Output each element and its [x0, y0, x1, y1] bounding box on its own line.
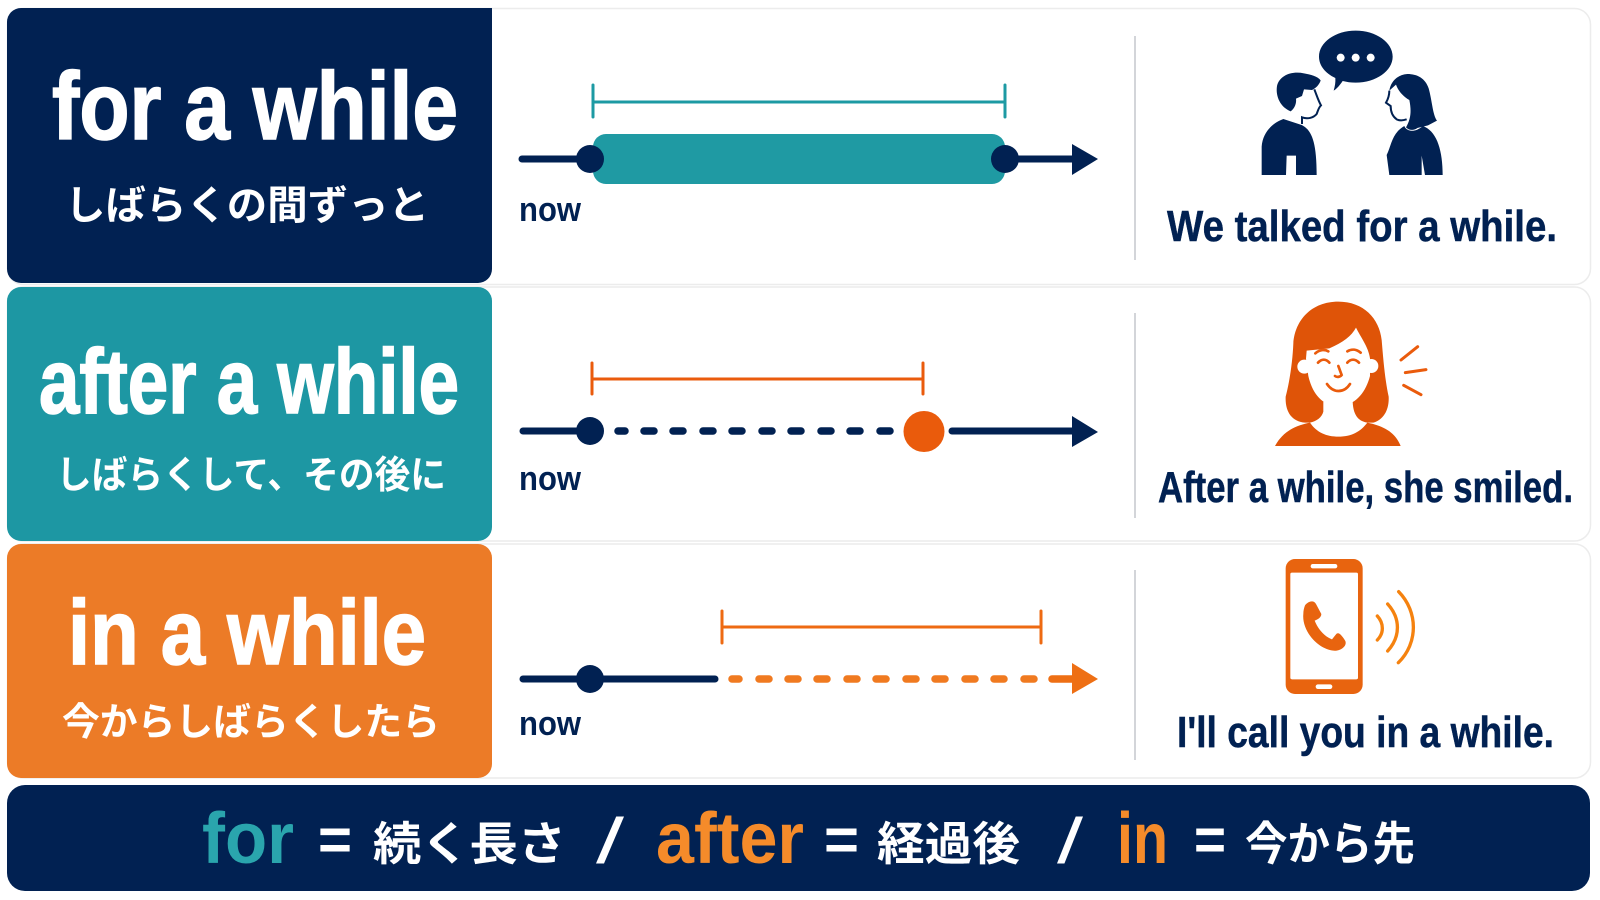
hair	[1286, 302, 1389, 423]
label block	[7, 8, 492, 283]
in meaning: 今から先	[1245, 818, 1415, 870]
separator: /	[1057, 805, 1083, 877]
handset	[1303, 601, 1346, 651]
equals: =	[824, 806, 859, 873]
panel: after a while	[7, 287, 1590, 541]
interval bracket	[592, 363, 923, 394]
orange arrow	[1052, 675, 1075, 683]
sparkle lines	[1401, 347, 1426, 395]
arrowhead	[1072, 144, 1098, 175]
panel: in a while	[7, 544, 1590, 778]
in keyword: in	[1117, 799, 1168, 879]
interval bracket	[722, 611, 1041, 643]
divider	[1134, 570, 1136, 760]
summary bar	[7, 785, 1590, 891]
solid line start	[523, 428, 590, 434]
timeline	[519, 363, 1098, 498]
separator: /	[596, 805, 624, 877]
time line and arrow	[522, 156, 1075, 162]
row card	[8, 8, 1590, 284]
equals: =	[318, 806, 352, 873]
Japanese meaning: 今からしばらくしたら	[62, 702, 440, 744]
dashed wait	[618, 427, 890, 435]
heading: after a while	[39, 331, 459, 433]
timeline	[519, 85, 1098, 229]
row card	[8, 287, 1590, 541]
equals: =	[1194, 806, 1226, 873]
now label: now	[519, 460, 582, 498]
duration bar	[593, 134, 1005, 184]
start dot	[576, 145, 604, 173]
heading: in a while	[68, 582, 426, 684]
now dot	[576, 665, 604, 693]
shoulders	[1275, 423, 1401, 446]
speech bubble	[1319, 31, 1393, 91]
screen	[1290, 573, 1358, 679]
label block	[7, 544, 492, 778]
now label: now	[519, 705, 582, 743]
after keyword: after	[656, 799, 804, 879]
now label: now	[519, 191, 582, 229]
divider	[1134, 313, 1136, 518]
icon: smiling woman	[1275, 302, 1426, 446]
woman	[1389, 74, 1437, 130]
dashed future	[732, 675, 1034, 683]
man	[1277, 73, 1321, 111]
panel: for a while	[7, 8, 1590, 284]
bar background	[7, 785, 1590, 891]
for keyword: for	[202, 799, 294, 879]
icon: two people talking	[1262, 31, 1443, 175]
after meaning: 経過後	[877, 818, 1020, 870]
ears	[1297, 360, 1311, 374]
icon: phone calling	[1286, 559, 1413, 694]
signal arcs	[1377, 592, 1413, 663]
end dot	[991, 145, 1019, 173]
duration bracket	[593, 85, 1005, 117]
Japanese meaning: しばらくの間ずっと	[65, 184, 429, 228]
divider	[1134, 36, 1136, 260]
face	[1306, 328, 1370, 406]
line and arrow	[952, 428, 1075, 434]
row card	[8, 544, 1590, 778]
phone body	[1286, 559, 1363, 694]
heading: for a while	[52, 53, 458, 160]
neck	[1310, 402, 1367, 437]
smile details	[1315, 350, 1361, 391]
for meaning: 続く長さ	[373, 818, 566, 870]
later point	[904, 411, 944, 452]
timeline	[519, 611, 1098, 743]
label block	[7, 287, 492, 541]
now dot	[576, 417, 604, 445]
Japanese meaning: しばらくして、その後に	[56, 455, 446, 497]
solid line to now	[523, 676, 715, 682]
